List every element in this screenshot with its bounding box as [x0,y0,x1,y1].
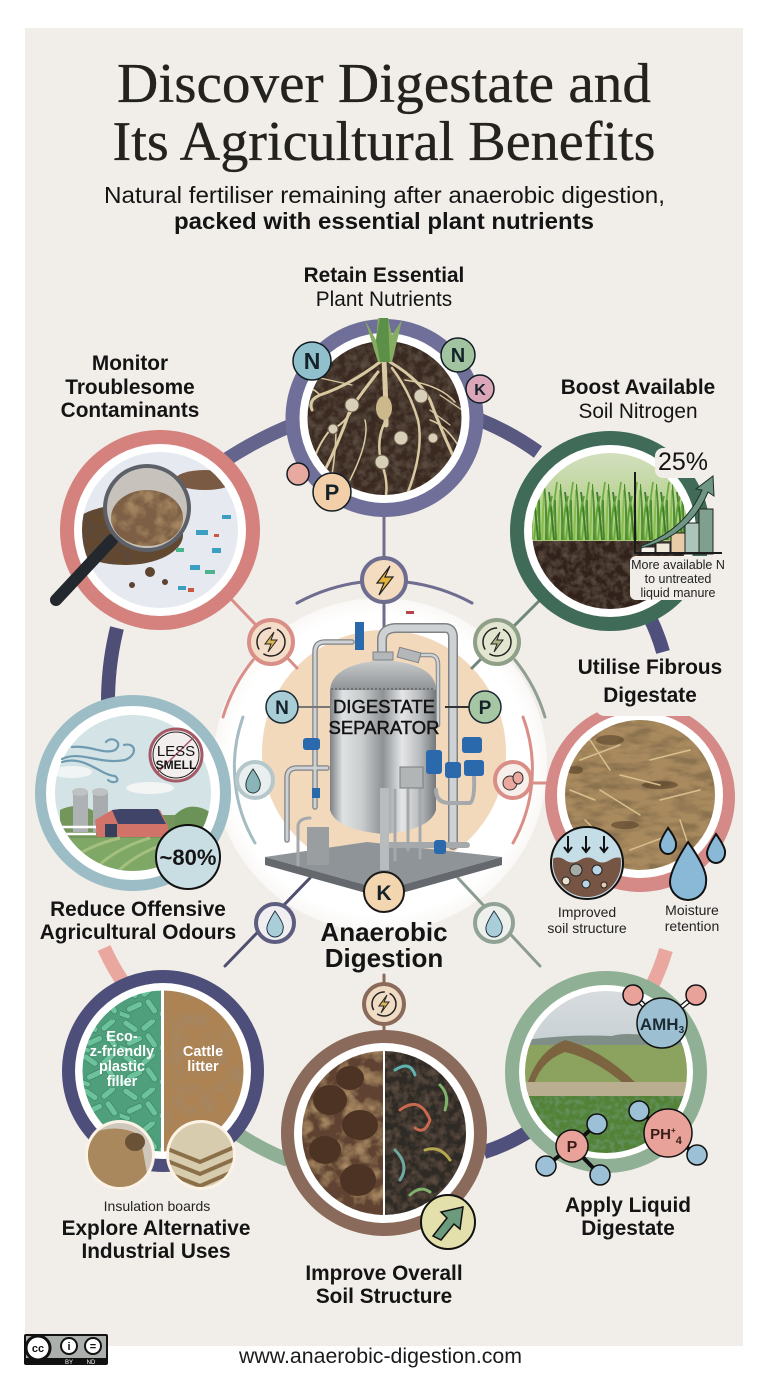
molecule: PH4: + [671,1126,676,1135]
heading: anaerobic digestion: Digestion [325,943,443,973]
nutrient badge: P: P [325,480,339,505]
heading: monitor troublesome contaminants: Troublesome [65,376,195,399]
title [112,53,656,173]
badge: growth arrow [421,1195,475,1249]
filler label [90,1029,154,1090]
plant shoot [365,318,402,362]
nutrient badge: P [313,473,351,511]
molecule: AMH3: 3 [679,1025,685,1036]
caption: more available N: to untreated [645,572,711,586]
centre peach disc [262,630,506,874]
filler label: Eco- [106,1029,138,1045]
molecule: PH4: 4 [676,1135,683,1147]
percent label: 25%: 25% [658,448,708,476]
heading: improve overall soil structure [305,1262,463,1308]
heading: anaerobic digestion: Anaerobic [320,917,448,947]
heading: reduce offensive agricultural odours [40,898,236,944]
centre white disc [213,598,547,932]
digestate separator illustration [265,611,502,898]
heading: explore alternative industrial uses [62,1217,250,1263]
filler label: filler [107,1074,138,1090]
nutrient badge: N [293,342,331,380]
subtitle: packed with essential plant nutrients [174,208,594,234]
filler label: plastic [99,1059,145,1075]
node: water left [237,762,273,798]
licence badge: i [67,1341,71,1353]
heading: improve overall soil structure: Improve Overall [305,1262,463,1285]
litter label [183,1044,223,1075]
hub spokes and arcs [200,510,552,1040]
outer ring connecting segments [104,420,666,1160]
caption: improved soil structure: soil structure [547,920,627,936]
heading: boost available soil nitrogen [561,376,715,423]
nutrient badge: N: N [304,348,320,374]
nutrient badge: centre K [364,872,404,912]
caption: more available N: liquid manure [640,586,716,600]
panel: reduce odours [35,695,231,891]
heading: improve overall soil structure: Soil Structure [316,1285,452,1308]
nutrient connector lines [298,706,470,708]
nutrient badge: centre N [266,691,298,723]
caption: moisture retention [665,902,719,934]
heading: explore alternative industrial uses: Explore Alternative [62,1217,250,1240]
licence badge: = [90,1341,96,1353]
caption: more available N: More available N [631,558,725,572]
caption: improved soil structure [547,904,627,936]
nutrient badge: centre N: N [275,698,289,719]
heading: utilise fibrous digestate: Utilise Fibrous [578,656,722,679]
caption: improved soil structure: Improved [558,904,616,920]
panel: retain essential plant nutrients [286,318,494,517]
nutrient badge: centre P: P [479,698,492,719]
node: energy cycle left [249,620,293,664]
heading: anaerobic digestion [320,917,448,973]
badge: less smell: LESS [157,743,195,760]
molecule: P [536,1114,610,1185]
nutrient badge: N green [441,338,475,372]
heading: monitor troublesome contaminants: Monitor [92,352,168,375]
heading: apply liquid digestate [565,1194,691,1240]
heading: apply liquid digestate: Apply Liquid [565,1194,691,1217]
website url: www.anaerobic-digestion.com [238,1345,522,1368]
subtitle [104,182,665,234]
panel: explore alternative uses [62,970,264,1190]
filler label: z-friendly [90,1044,154,1060]
licence badge [24,1334,108,1366]
badge: about 80 percent: ~80% [160,845,216,870]
heading: retain essential plant nutrients [304,264,464,311]
molecule: P: P [567,1139,578,1156]
badge: about 80 percent [156,825,220,889]
node: drop lower right [475,904,513,942]
nutrient badge: K [466,375,494,403]
caption: more available N [630,556,726,600]
nutrient badge: K: K [474,382,486,399]
separator label [328,696,440,738]
panel: utilise fibrous digestate [545,712,735,933]
inset: insulation board 2 [165,1120,237,1190]
caption: insulation boards: Insulation boards [104,1198,210,1214]
icon: wind lines [62,739,134,782]
litter label: litter [187,1059,219,1075]
panel: monitor contaminants [56,430,260,630]
heading: boost available soil nitrogen: Boost Available [561,376,715,399]
litter label: Cattle [183,1044,223,1060]
subtitle: Natural fertiliser remaining after anaerobic digestion, [104,182,665,208]
heading: boost available soil nitrogen: Soil Nitrogen [578,400,698,423]
title: Discover Digestate and [117,53,651,115]
bar chart: available nitrogen [635,472,722,554]
molecule: AMH3 [623,985,706,1048]
inset: insulation board 1 [85,1120,155,1190]
licence badge: BY [65,1360,73,1366]
panel: apply liquid digestate [505,971,707,1185]
heading: monitor troublesome contaminants: Contaminants [61,399,199,422]
badge: less smell: SMELL [156,758,196,772]
node: droplets right [495,762,531,798]
molecule: PH4 [629,1101,707,1165]
heading: apply liquid digestate: Digestate [581,1217,675,1240]
licence badge: cc [32,1343,44,1355]
node: energy cycle right [475,620,519,664]
icon: improved soil structure [550,827,625,900]
soil and roots photo [305,340,465,500]
panel: boost available soil nitrogen [510,431,710,631]
separator label: DIGESTATE [333,696,435,717]
node: energy cycle bottom [364,984,404,1024]
heading: utilise fibrous digestate: Digestate [603,684,697,707]
nutrient dot [287,463,309,485]
nutrient badge: centre P [469,691,501,723]
heading backing: utilise fibrous digestate [595,690,705,716]
heading: retain essential plant nutrients: Plant Nutrients [316,288,452,311]
heading: reduce offensive agricultural odours: Reduce Offensive [50,898,226,921]
caption: moisture retention: retention [665,918,719,934]
panel: improve overall soil structure [281,1030,487,1249]
node: drop lower left [256,904,294,942]
caption: moisture retention: Moisture [665,902,719,918]
badge: less smell [150,729,202,781]
node: lightning top [362,558,406,602]
icon: moisture drops [660,828,725,900]
molecule: AMH3: AMH [640,1015,679,1034]
heading: monitor troublesome contaminants [61,352,199,422]
nutrient badge: centre K: K [376,882,392,905]
heading: reduce offensive agricultural odours: Agricultural Odours [40,921,236,944]
separator label: SEPARATOR [328,717,440,738]
heading: retain essential plant nutrients: Retain Essential [304,264,464,287]
title: Its Agricultural Benefits [112,111,656,173]
molecule: PH4: PH [650,1126,671,1143]
nutrient badge: N green: N [451,345,465,367]
heading: utilise fibrous digestate [578,656,722,707]
icon: magnifying glass [56,466,189,600]
heading: explore alternative industrial uses: Industrial Uses [81,1240,231,1263]
licence badge: ND [87,1360,96,1366]
